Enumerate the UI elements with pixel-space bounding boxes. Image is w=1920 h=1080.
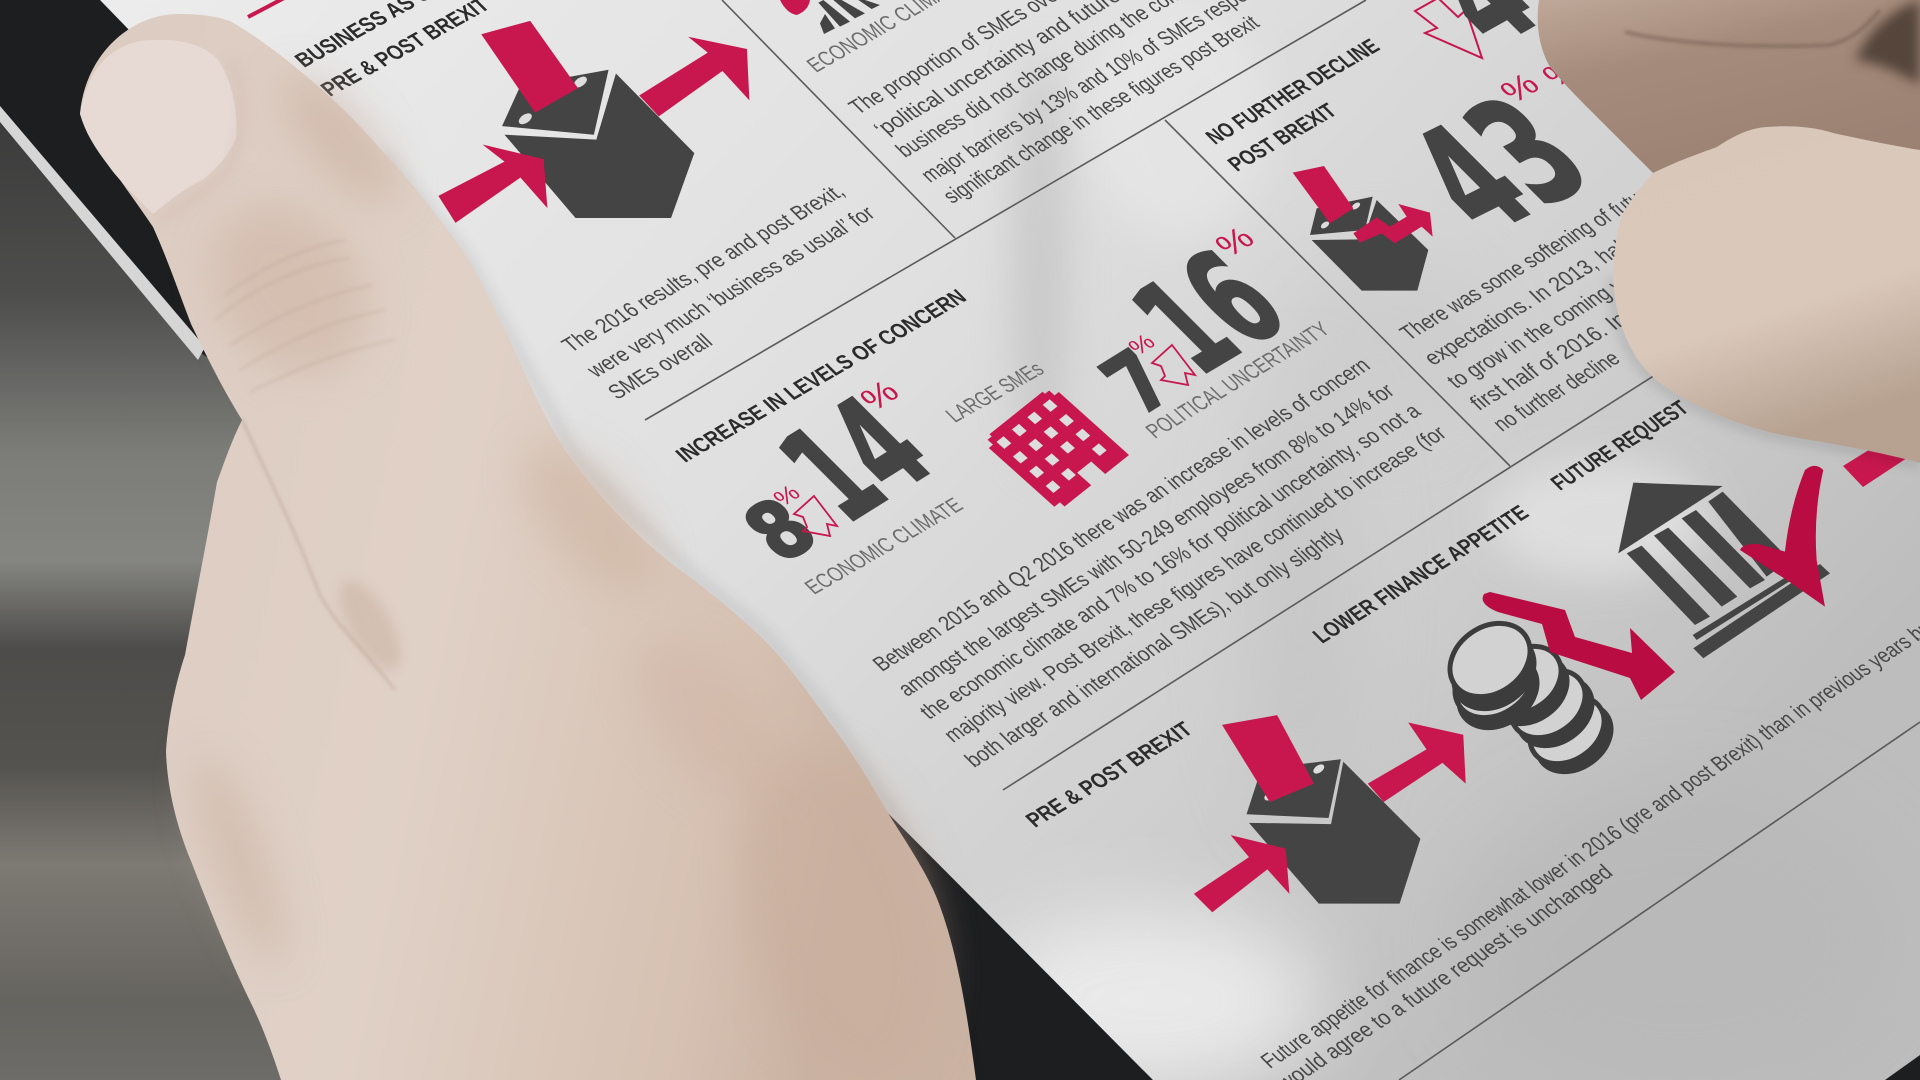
icon: bank — [1618, 466, 1830, 658]
text: proportion of SMEs — [843, 0, 1265, 208]
text: softening of future expectations: first half of 2016. Initially — [1464, 284, 1672, 415]
heading: no further decline: POST BREXIT — [1222, 99, 1342, 176]
icon: ballot box with arrows — [438, 21, 749, 223]
palm crease shading — [328, 572, 412, 678]
text: business as usual: were very much ‘business as usual’ for — [580, 201, 880, 382]
icon: ballot box with arrows — [1194, 715, 1466, 912]
icon: red drop and columns — [780, 0, 880, 34]
text: between 2015 and Q2 2016: amongst the largest SMEs with 50-249 employees from 8% to 14% for — [892, 378, 1400, 701]
thumb cuticle shading — [160, 60, 241, 222]
heading: lower finance appetite: LOWER FINANCE APPETITE — [1307, 501, 1534, 648]
label: large SMEs: LARGE SMEs — [940, 357, 1049, 427]
thumb nail — [80, 40, 236, 214]
stat: 14 percent: 14 — [748, 370, 963, 550]
fold between thumb and palm — [242, 420, 395, 690]
label: political uncertainty: POLITICAL UNCERTAINTY — [1140, 317, 1335, 443]
right lower finger — [1613, 126, 1920, 463]
text: between 2015 and Q2 2016: majority view. Post Brexit, these figures have continued to increase (for — [938, 421, 1451, 747]
blurred background behind tablet — [0, 112, 500, 1080]
icon: zigzag arrow down — [1483, 592, 1675, 700]
panel: economic climate barriers — [780, 0, 1265, 208]
text: softening of future expectations — [1394, 178, 1686, 436]
heading: future request: FUTURE REQUEST — [1545, 396, 1694, 495]
text: between 2015 and Q2 2016: Between 2015 and Q2 2016 there was an increase in levels of concern — [867, 353, 1375, 676]
text: business as usual: SMEs overall — [602, 329, 717, 404]
icon: red shape fragment — [1843, 448, 1907, 487]
heading: pre and post brexit: PRE & POST BREXIT — [1020, 717, 1198, 832]
dark gap between fingers — [1855, 0, 1920, 85]
text: between 2015 and Q2 2016 — [867, 353, 1451, 772]
stat: 43 percent: 43 — [1373, 68, 1628, 265]
icon: building — [981, 385, 1129, 511]
text: business as usual — [556, 179, 880, 404]
hand shadow on paper — [383, 152, 976, 1080]
heading: increase in levels of concern: INCREASE IN LEVELS OF CONCERN — [670, 285, 971, 467]
panel: business as usual — [248, 0, 880, 404]
stat: 14 percent: % — [853, 374, 907, 418]
stat: 43 percent — [1373, 67, 1628, 265]
icon: up arrow outline — [1152, 345, 1195, 385]
panel: no further decline — [1200, 0, 1686, 436]
tablet silver edge — [0, 106, 205, 360]
left hand holding tablet — [80, 14, 976, 1080]
stat: 7 percent: 7 — [1082, 334, 1195, 432]
text: softening of future expectations: to grow in the coming year — [1441, 259, 1653, 393]
icon: red tick — [1740, 466, 1825, 607]
heading: no further decline — [1200, 34, 1385, 176]
stat: 43 percent: % — [1493, 67, 1547, 110]
label: economic climate: ECONOMIC CLIMATE — [799, 493, 968, 599]
finger crease — [1625, 10, 1880, 46]
red accent stroke — [248, 0, 286, 17]
text: softening of future expectations: There was some softening of future — [1394, 178, 1662, 345]
icon: ballot box with zigzag arrow — [1293, 166, 1433, 291]
text: softening of future expectations: expectations. In 2013, half (43%) — [1418, 203, 1686, 370]
panel: increase in levels of concern — [670, 220, 1451, 772]
stat: 7 percent: % — [1123, 330, 1161, 360]
stat: 16 percent: 16 — [1102, 225, 1317, 402]
text: softening of future expectations: no further decline — [1487, 346, 1625, 436]
icon: down arrow outline — [1415, 0, 1482, 58]
stat: 14 percent — [748, 370, 963, 550]
text: between 2015 and Q2 2016: both larger and international SMEs), but only slightly — [959, 522, 1349, 772]
icon: up arrow outline — [794, 496, 837, 536]
dividers — [722, 0, 955, 238]
stat: partially hidden figure: % — [1535, 51, 1589, 94]
text: business as usual: The 2016 results, pre and post Brexit, — [556, 179, 850, 357]
stat: 8 percent: 8 — [724, 481, 837, 579]
stat: 16 percent: % — [1208, 220, 1262, 264]
icon: coin stack — [1436, 608, 1624, 786]
heading: no further decline: NO FURTHER DECLINE — [1200, 34, 1385, 149]
stat: 8 percent: % — [768, 481, 806, 511]
finger shadow on paper — [1613, 277, 1920, 463]
panel: finance appetite — [1020, 396, 1920, 1080]
right upper finger — [1538, 0, 1920, 173]
stat: 16 percent — [1102, 220, 1317, 402]
knuckle wrinkles — [215, 240, 395, 392]
text: between 2015 and Q2 2016: the economic climate and 7% to 16% for political uncertainty, so not a — [914, 399, 1426, 724]
